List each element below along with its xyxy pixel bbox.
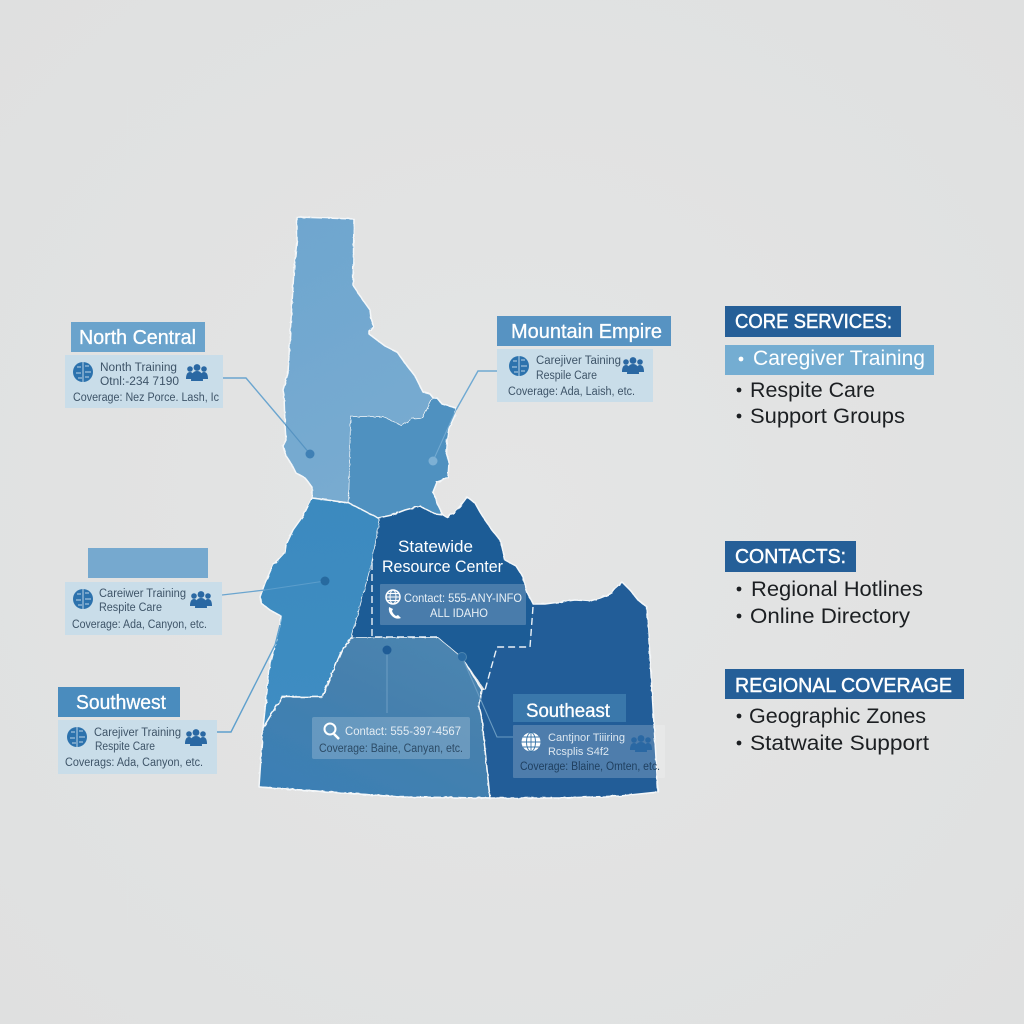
card: mountain empire: Carejiver Taining <box>536 355 621 367</box>
card: mountain empire <box>497 349 653 402</box>
card: north central: Nonth Training <box>100 362 177 374</box>
heading: core services <box>725 306 901 337</box>
heading: statewide resource center: Resource Center <box>382 558 503 576</box>
card: north central: Otnl:-234 7190 <box>100 376 179 388</box>
list: regional coverage: Statwaite Support <box>750 732 929 755</box>
card: southeast <box>513 725 665 778</box>
panel: regional coverage <box>725 669 964 755</box>
card: west <box>65 582 222 635</box>
list: contacts: Online Directory <box>750 605 911 628</box>
list: core services <box>737 379 905 428</box>
callout: north central <box>65 322 223 408</box>
card: west: Careiwer Training <box>99 588 186 600</box>
callout: southwest <box>58 687 217 774</box>
heading: statewide resource center: Statewide <box>398 538 473 556</box>
connector: southwest <box>217 625 280 732</box>
southern outline <box>259 497 658 798</box>
label: mountain empire <box>497 316 671 346</box>
statewide dashed boundary <box>372 563 533 690</box>
region: mountain empire <box>349 398 456 518</box>
card: central south: Contact: 555-397-4567 <box>345 726 461 738</box>
region: west <box>260 498 380 728</box>
panel: contacts <box>725 541 923 628</box>
region: north central <box>283 217 433 503</box>
callout: statewide resource center <box>380 538 526 625</box>
heading: contacts: CONTACTS: <box>735 546 846 568</box>
card: southeast: Cantjnor Tiiiring <box>548 732 625 744</box>
card: southwest <box>58 720 217 774</box>
highlighted item: caregiver training: Caregiver Training <box>753 347 925 370</box>
card: statewide contact: Contact: 555-ANY-INFO <box>404 591 522 605</box>
card: north central: Coverage: Nez Porce. Lash, Ic <box>73 392 219 404</box>
card: southwest: Coverags: Ada, Canyon, etc. <box>65 757 203 769</box>
card: central south: Coverage: Baine, Canyan, etc. <box>319 743 463 755</box>
card: mountain empire: Respile Care <box>536 370 597 382</box>
heading: regional coverage <box>725 669 964 699</box>
list: contacts <box>737 578 923 628</box>
card: southeast: Rcsplis S4f2 <box>548 746 609 758</box>
card: southeast: Coverage: Blaine, Omten, etc. <box>520 761 660 773</box>
card: statewide contact: ALL IDAHO <box>430 606 488 620</box>
callout: southeast <box>513 694 665 778</box>
list: regional coverage: Geographic Zones <box>749 705 926 728</box>
region: southeast <box>479 582 658 798</box>
eastern outline <box>433 398 456 515</box>
panel: core services <box>725 306 934 428</box>
card: southwest: Carejiver Training <box>94 727 181 739</box>
list: contacts: Regional Hotlines <box>751 578 923 601</box>
label: southwest <box>58 687 180 717</box>
label: north central: North Central <box>79 327 196 349</box>
connector: west <box>222 576 330 595</box>
region: statewide resource center <box>352 497 533 690</box>
card: statewide contact <box>380 584 526 625</box>
callout: mountain empire <box>497 316 671 402</box>
connector: southeast <box>458 652 513 737</box>
heading: core services: CORE SERVICES: <box>735 311 892 333</box>
label: southeast: Southeast <box>526 701 611 722</box>
list: regional coverage <box>737 705 929 755</box>
blank label: west <box>88 548 208 578</box>
card: west: Respite Care <box>99 602 162 614</box>
card: west: Coverage: Ada, Canyon, etc. <box>72 619 207 631</box>
map of Idaho regions <box>259 217 658 798</box>
card: north central <box>65 355 223 408</box>
connector: north central <box>223 378 314 458</box>
label: north central <box>71 322 205 352</box>
card: southwest: Respite Care <box>95 741 155 753</box>
heading: contacts <box>725 541 856 572</box>
list: core services: Respite Care <box>750 379 875 402</box>
card: central south <box>312 717 470 759</box>
heading: regional coverage: REGIONAL COVERAGE <box>735 675 952 697</box>
region: central south <box>259 637 490 798</box>
heading: statewide resource center <box>382 538 503 576</box>
connector: central south <box>382 646 392 713</box>
label: mountain empire: Mountain Empire <box>511 321 662 343</box>
label: southwest: Southwest <box>76 692 166 714</box>
callout: west <box>65 548 222 635</box>
highlighted item: caregiver training <box>725 345 934 375</box>
label: southeast <box>513 694 626 722</box>
card: mountain empire: Coverage: Ada, Laish, etc. <box>508 386 635 398</box>
connector: mountain empire <box>428 371 497 466</box>
list: core services: Support Groups <box>750 405 905 428</box>
